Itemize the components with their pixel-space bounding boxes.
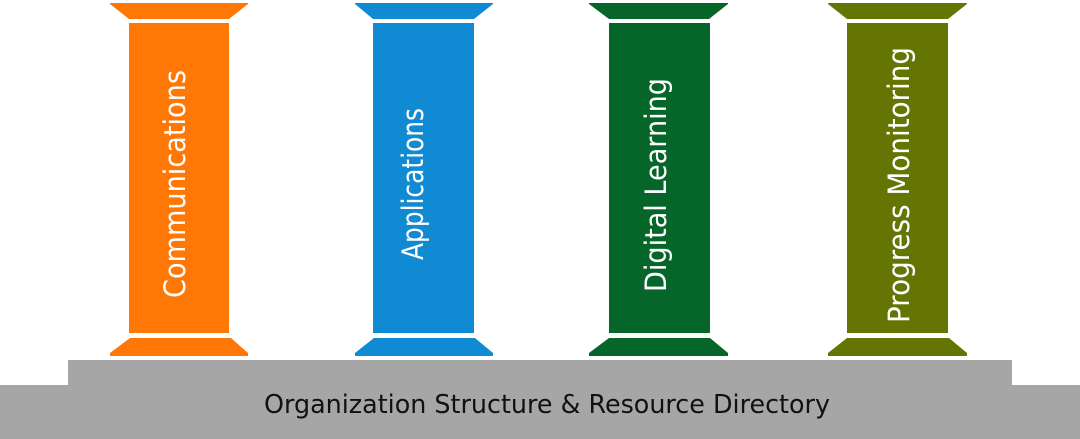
pillar: Digital Learning [589,3,728,356]
top cap [355,3,493,19]
top cap [828,3,967,19]
top cap [589,3,728,19]
upper step [68,360,1012,386]
shaft [609,23,710,333]
pillar: Communications [110,3,248,356]
bottom cap [110,338,248,356]
base label: Organization Structure & Resource Directory [264,390,830,420]
pillar: Applications [355,3,493,356]
label: Progress Monitoring [882,47,916,323]
shaft [373,23,474,333]
bottom cap [589,338,728,356]
label: Digital Learning [639,78,673,292]
label: Applications [396,108,430,260]
bottom cap [828,338,967,356]
shaft [847,23,948,333]
lower step [0,385,1080,439]
bottom cap [355,338,493,356]
base platform [0,360,1080,439]
top cap [110,3,248,19]
pillar: Progress Monitoring [828,3,967,356]
shaft [129,23,229,333]
label: Communications [158,70,192,298]
